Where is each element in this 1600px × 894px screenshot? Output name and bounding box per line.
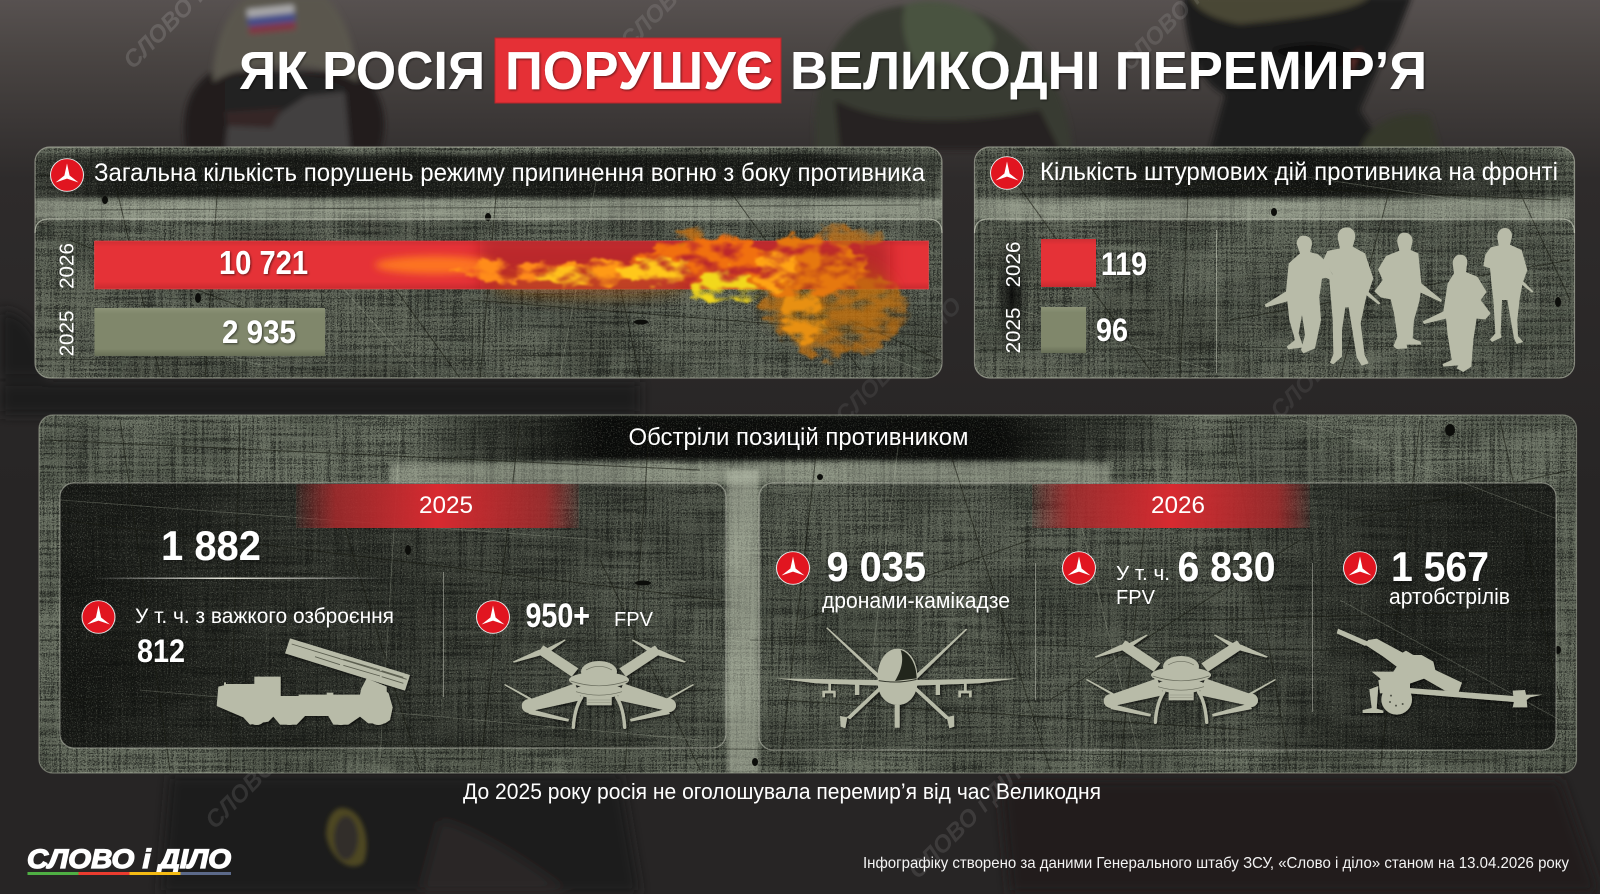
value 812: 812	[137, 633, 185, 669]
sub-panel: 2026	[759, 483, 1556, 750]
bar 2025: 96	[1041, 307, 1128, 353]
value 950+: 950+	[526, 597, 590, 635]
bar 2025: 2 935: 2 935	[222, 314, 296, 350]
pits	[102, 196, 1561, 766]
middle soldier helmet	[815, 1, 1072, 150]
icon: soldiers silhouettes	[1265, 227, 1533, 372]
panel: total ceasefire violations	[50, 158, 928, 356]
total 1 882: 1 882	[161, 522, 261, 569]
year labels: 2026	[1002, 242, 1025, 287]
panel: assault actions	[990, 156, 1558, 373]
bar 2026: 10 721: 10 721	[219, 244, 308, 281]
textured panel backgrounds	[30, 140, 1580, 780]
panel heading: Загальна кількість порушень режиму припинення вогню з боку противника	[94, 159, 925, 187]
value 1 567: 1 567	[1391, 543, 1489, 590]
title highlight box	[495, 38, 781, 103]
icon: quadcopter drone	[504, 639, 694, 727]
title	[239, 38, 1427, 103]
icon: red badge	[776, 551, 810, 585]
logo: СЛОВО і ДІЛО	[27, 844, 231, 874]
footnote: До 2025 року росія не оголошувала перемир’я від час Великодня	[463, 779, 1101, 804]
year tag 2026	[1032, 484, 1310, 528]
right soldier face and shoulders	[1183, 0, 1440, 150]
year labels: 2025	[56, 311, 78, 356]
icon: red badge	[990, 156, 1024, 190]
title: ЯК РОСІЯ	[239, 41, 485, 101]
year labels	[56, 243, 78, 356]
watermarks: СЛОВО і ДІЛО	[1265, 287, 1403, 424]
year labels: 2025	[1002, 308, 1025, 353]
year labels	[995, 234, 1029, 358]
value 9 035: 9 035	[826, 543, 926, 590]
bar 2026: 119	[1041, 239, 1147, 287]
panel outlines	[35, 147, 1576, 773]
title: ВЕЛИКОДНІ ПЕРЕМИР’Я	[790, 41, 1427, 101]
watermarks: СЛОВО і ДІЛО	[903, 747, 1041, 884]
sub-panel: 2025	[60, 483, 726, 748]
label including: У т. ч.	[1116, 563, 1170, 585]
bar 2025: 2 935	[94, 308, 325, 356]
year tag 2026: 2026	[1151, 492, 1205, 519]
bar 2025: 96: 96	[1096, 312, 1128, 348]
heavy weapons label: У т. ч. з важкого озброєння	[135, 604, 394, 628]
lower soldier dark shapes	[0, 310, 1600, 894]
bar 2026: 119: 119	[1101, 246, 1147, 282]
year labels: 2026	[56, 243, 78, 289]
icon: red badge	[50, 158, 84, 192]
source credit: Інфографіку створено за даними Генерального штабу ЗСУ, «Слово і діло» станом на 13.04.2026 року	[863, 855, 1569, 872]
panel heading: Кількість штурмових дій противника на фронті	[1040, 158, 1558, 186]
watermarks: СЛОВО і ДІЛО	[200, 697, 338, 834]
title: ПОРУШУЄ	[505, 41, 773, 101]
yellow ring detail	[326, 808, 367, 866]
value 6 830: 6 830	[1178, 543, 1276, 590]
icon: red badge	[1343, 551, 1377, 585]
FPV label: FPV	[614, 609, 654, 631]
top panel header dark bands	[35, 154, 942, 198]
icon: red badge	[1062, 551, 1096, 585]
kamikaze drones label: дронами-камікадзе	[822, 588, 1010, 613]
year tag 2025: 2025	[419, 492, 473, 519]
watermarks	[118, 0, 1403, 884]
icon: quadcopter drone	[1086, 634, 1276, 722]
bottom panel dark zones	[400, 415, 1200, 460]
icon: red badge	[82, 600, 116, 634]
icon: rocket launcher truck	[217, 638, 410, 725]
watermarks: СЛОВО і ДІЛО	[830, 292, 968, 429]
icon: howitzer	[1337, 629, 1543, 715]
fire effect over the bar	[375, 226, 907, 356]
panel heading: Обстріли позицій противником	[628, 424, 968, 451]
icon: fixed wing drone	[777, 627, 1018, 728]
left soldier silhouette	[184, 0, 384, 150]
FPV label: FPV	[1116, 587, 1156, 609]
year tag 2025	[296, 484, 579, 528]
glow strips	[35, 199, 942, 219]
bar 2026: 10 721	[94, 241, 928, 289]
icon: red badge	[476, 600, 510, 634]
artillery label: артобстрілів	[1389, 584, 1510, 609]
panel: shelling of positions	[60, 424, 1556, 750]
